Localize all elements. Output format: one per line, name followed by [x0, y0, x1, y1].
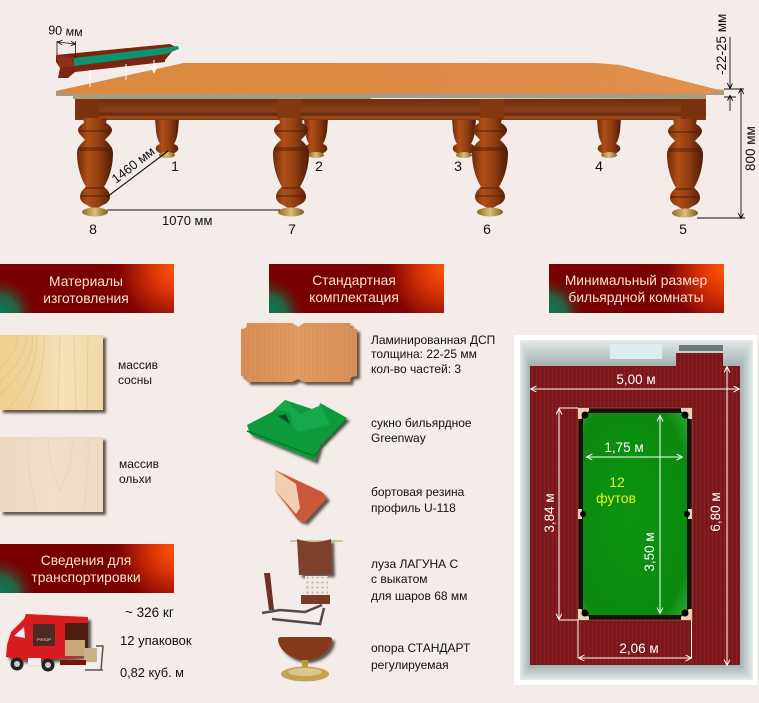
walls: [520, 340, 753, 680]
leg numbers: [89, 158, 687, 237]
text: board: кол-во частей: 3: [371, 362, 461, 376]
transport info: 12 упаковок: [120, 633, 192, 648]
door: [679, 345, 723, 351]
icon: adjustable support: [278, 637, 332, 682]
pine sample: [0, 335, 103, 410]
room dimension labels: 6,80 м: [708, 492, 723, 532]
alder label: ольхи: [119, 472, 151, 486]
pockets: [578, 408, 692, 620]
text: pocket: для шаров 68 мм: [371, 589, 467, 603]
transport info: [120, 605, 192, 680]
carpet: [530, 353, 740, 665]
text: pocket: с выкатом: [371, 572, 428, 586]
icon: delivery truck: [6, 614, 103, 672]
icon: laminated board: [241, 323, 357, 382]
leg numbers: 7: [288, 221, 296, 237]
window: [610, 344, 662, 359]
room dimension labels: 3,50 м: [642, 532, 657, 572]
text: cloth: Greenway: [371, 431, 426, 445]
transport info: 0,82 куб. м: [120, 665, 184, 680]
white arrows down: [90, 60, 154, 87]
banner: materials: Материалы: [49, 274, 123, 289]
room dimension labels: 2,06 м: [619, 641, 659, 656]
room dimensions: [531, 367, 739, 665]
text: cloth: сукно бильярдное: [371, 416, 472, 430]
icon: pocket: [262, 539, 343, 624]
pine label: массив: [118, 358, 158, 372]
banner: transport: транспортировки: [31, 570, 141, 585]
table top slate: [56, 63, 724, 99]
table apron: [75, 99, 706, 120]
pine label: сосны: [118, 373, 152, 387]
transport info: ~ 326 кг: [125, 605, 174, 620]
leg numbers: 2: [315, 158, 323, 174]
room dimension labels: 1,75 м: [604, 440, 644, 455]
icon: cloth: [247, 400, 347, 461]
leg dimensions: [107, 143, 280, 228]
banner: transport: [0, 544, 174, 593]
text: support: опора СТАНДАРТ: [371, 641, 471, 655]
text: rubber: профиль U-118: [371, 501, 456, 515]
table size label: 12: [609, 474, 625, 490]
height dimensions: [697, 14, 758, 218]
banner: materials: [0, 264, 174, 313]
banner: standard set: комплектация: [309, 290, 399, 305]
text: support: регулируемая: [371, 658, 449, 672]
panel: room plan: [514, 335, 757, 685]
rail with cloth, 90 mm: [48, 23, 179, 87]
banner: materials: изготовления: [43, 291, 129, 306]
icon: cushion rubber: [275, 470, 327, 522]
alder sample: [0, 437, 103, 512]
leg numbers: 4: [595, 158, 603, 174]
leg numbers: 8: [89, 221, 97, 237]
room dimension labels: 5,00 м: [616, 372, 656, 387]
leg numbers: 1: [171, 158, 179, 174]
text: rubber: бортовая резина: [371, 485, 465, 499]
alder label: массив: [119, 457, 159, 471]
banner: minimum room size: Минимальный размер: [565, 273, 707, 288]
rear legs: [155, 119, 621, 158]
height dimensions: 800 мм: [743, 126, 758, 171]
panel: materials: [0, 335, 159, 512]
banner: standard set: Стандартная: [312, 273, 396, 288]
icon: delivery truck: РУПОР: [37, 637, 51, 642]
banner: minimum room size: [549, 264, 724, 313]
room dimension labels: 3,84 м: [542, 493, 557, 533]
banner: transport: Сведения для: [41, 553, 131, 568]
leg dimensions: 1070 мм: [162, 213, 212, 228]
height dimensions: -22-25 мм: [714, 14, 729, 75]
banner: minimum room size: бильярдной комнаты: [568, 290, 704, 305]
room dimension labels: [542, 372, 723, 656]
table size label: футов: [596, 490, 636, 506]
text: board: толщина: 22-25 мм: [371, 347, 477, 361]
front legs: [77, 118, 703, 218]
text: board: Ламинированная ДСП: [371, 333, 495, 347]
leg numbers: 3: [454, 158, 462, 174]
text: pocket: луза ЛАГУНА С: [371, 557, 459, 571]
leg dimensions: 1460 мм: [109, 143, 158, 186]
billiard table drawing: [56, 63, 724, 218]
dimension 90 mm: 90 мм: [48, 23, 83, 39]
pool table: [578, 408, 692, 620]
leg numbers: 6: [483, 221, 491, 237]
banner: standard set: [269, 264, 444, 313]
leg numbers: 5: [679, 221, 687, 237]
